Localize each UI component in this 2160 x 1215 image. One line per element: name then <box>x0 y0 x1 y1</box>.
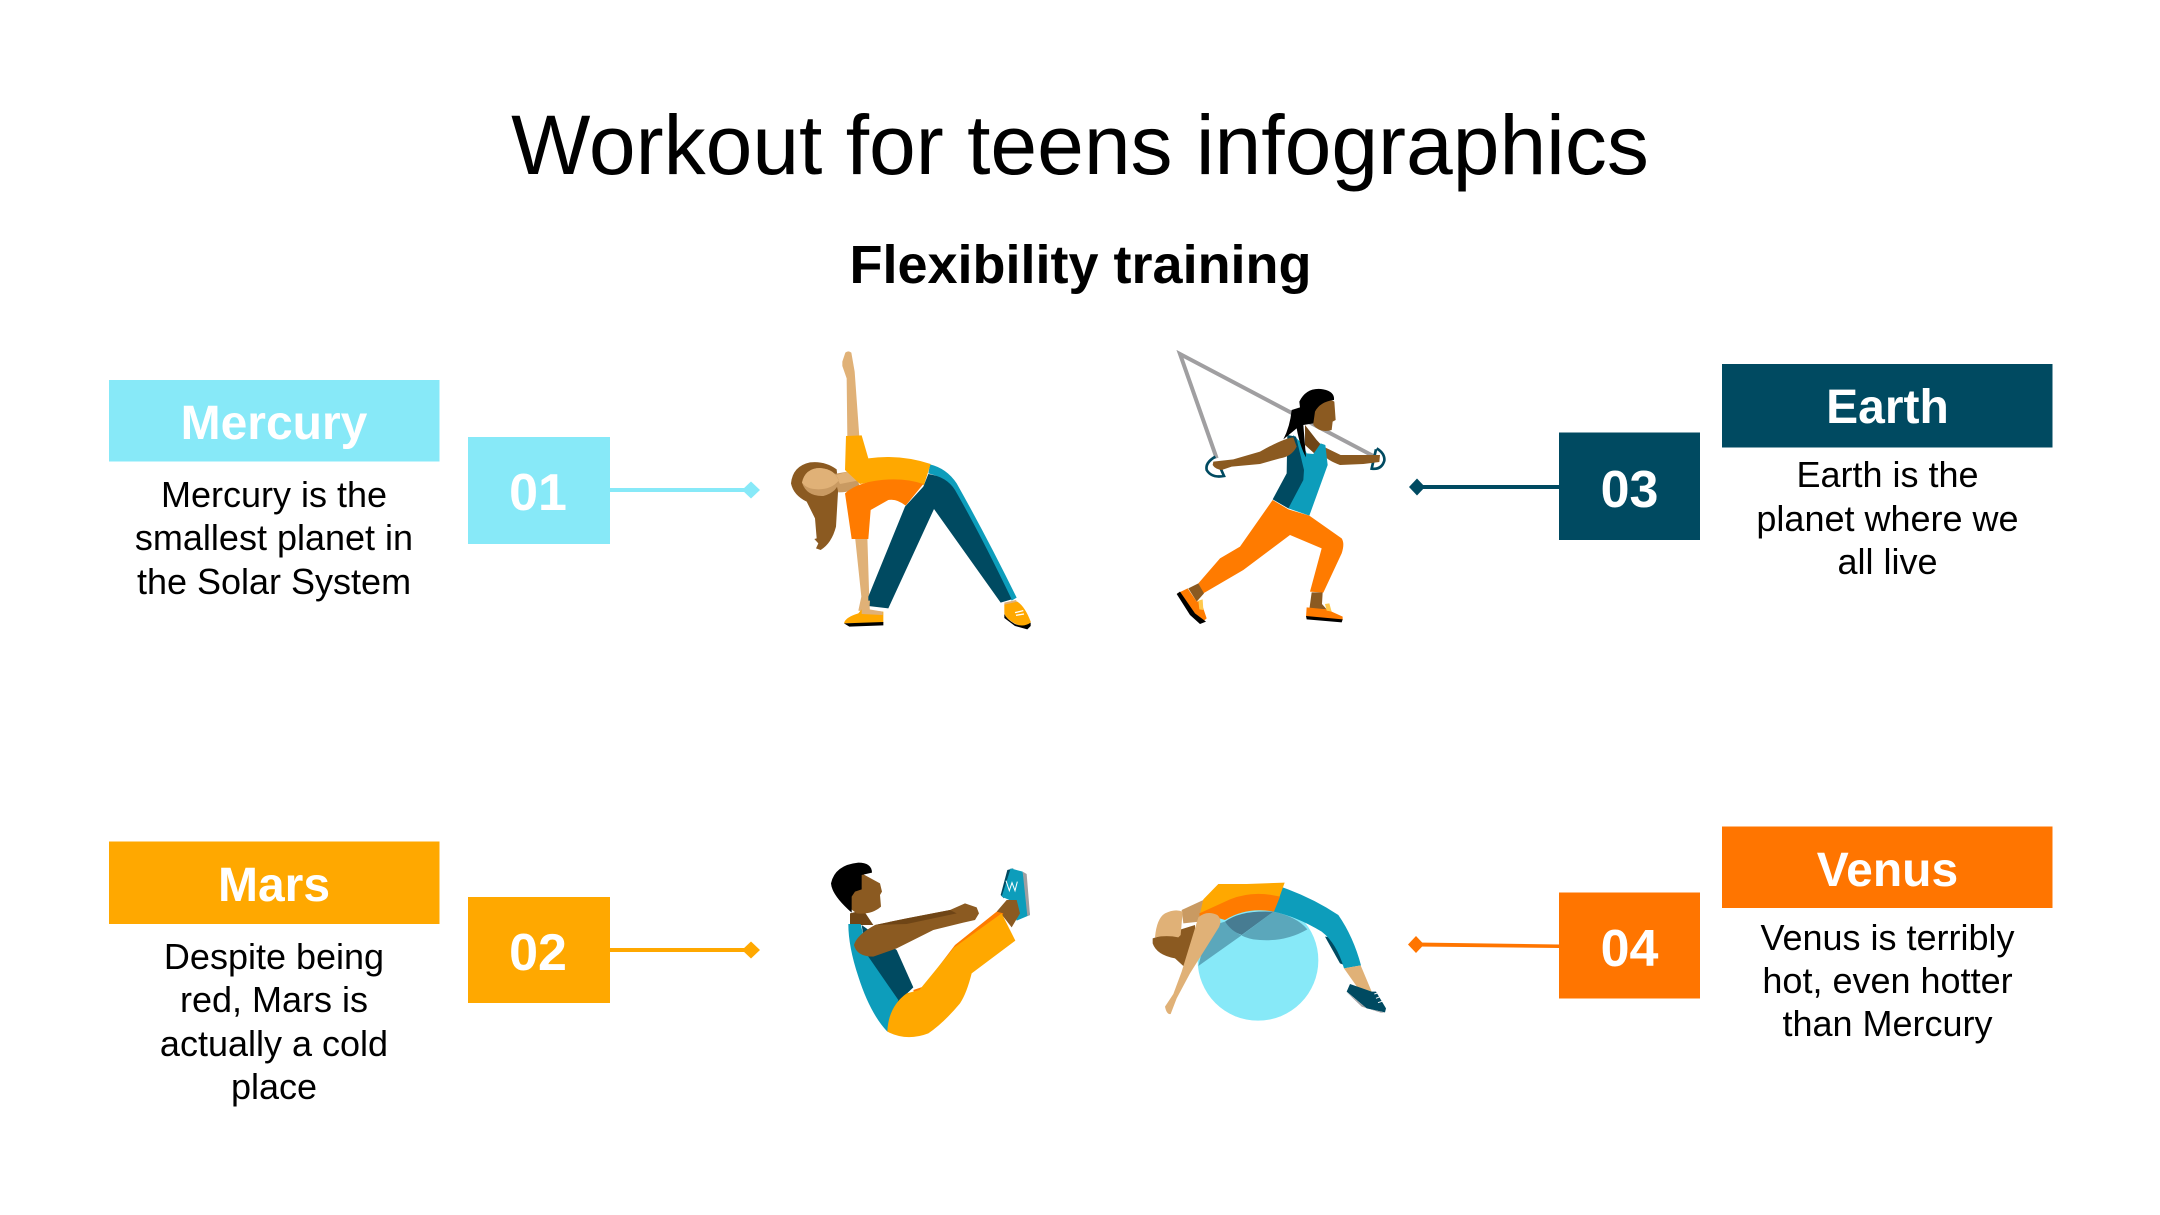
Mercury description: Mercury is the <box>161 474 387 515</box>
number 03: 03 <box>1601 461 1658 519</box>
Mars description: actually a cold <box>160 1023 388 1064</box>
Mercury heading: Mercury <box>181 397 368 450</box>
Venus description: hot, even hotter <box>1762 960 2013 1001</box>
Mars description: Despite being <box>164 936 384 977</box>
number 01: 01 <box>509 464 567 522</box>
Earth description: all live <box>1837 541 1938 582</box>
panel: Mars <box>109 842 760 1107</box>
Venus description: than Mercury <box>1782 1003 1993 1044</box>
Mars description: place <box>231 1066 317 1107</box>
Mercury description: smallest planet in <box>135 517 413 558</box>
figure: woman side bend <box>791 351 1031 629</box>
arrow 02 <box>610 942 760 958</box>
figure: woman lunge with straps <box>1177 354 1384 624</box>
panel: Mercury <box>109 380 760 602</box>
Mars heading <box>109 842 440 924</box>
Mercury heading <box>109 380 440 462</box>
Venus heading: Venus <box>1817 844 1958 897</box>
number 02 <box>468 897 610 1003</box>
arrow 01 <box>610 482 760 498</box>
number 04 <box>1559 892 1700 998</box>
Mercury description: the Solar System <box>137 561 411 602</box>
title: Workout for teens infographics <box>511 98 1649 192</box>
Mars description: red, Mars is <box>180 979 368 1020</box>
panel: Venus <box>1408 826 2052 1044</box>
Earth description: Earth is the <box>1796 454 1979 495</box>
Earth heading: Earth <box>1826 381 1949 434</box>
Earth heading <box>1722 364 2052 448</box>
panel: Earth <box>1409 364 2052 582</box>
Earth description: planet where we <box>1756 498 2019 539</box>
arrow 03 <box>1409 478 1559 496</box>
number 04: 04 <box>1601 920 1658 978</box>
number 02: 02 <box>509 924 567 982</box>
figure: woman on exercise ball <box>1153 883 1386 1021</box>
number 03 <box>1559 432 1700 540</box>
number 01 <box>468 437 610 544</box>
Mars heading: Mars <box>218 859 330 912</box>
Venus description: Venus is terribly <box>1760 917 2015 958</box>
figure: man boat pose <box>831 863 1030 1037</box>
arrow 04 <box>1408 936 1559 953</box>
subtitle: Flexibility training <box>849 235 1312 295</box>
Venus heading <box>1722 826 2052 908</box>
